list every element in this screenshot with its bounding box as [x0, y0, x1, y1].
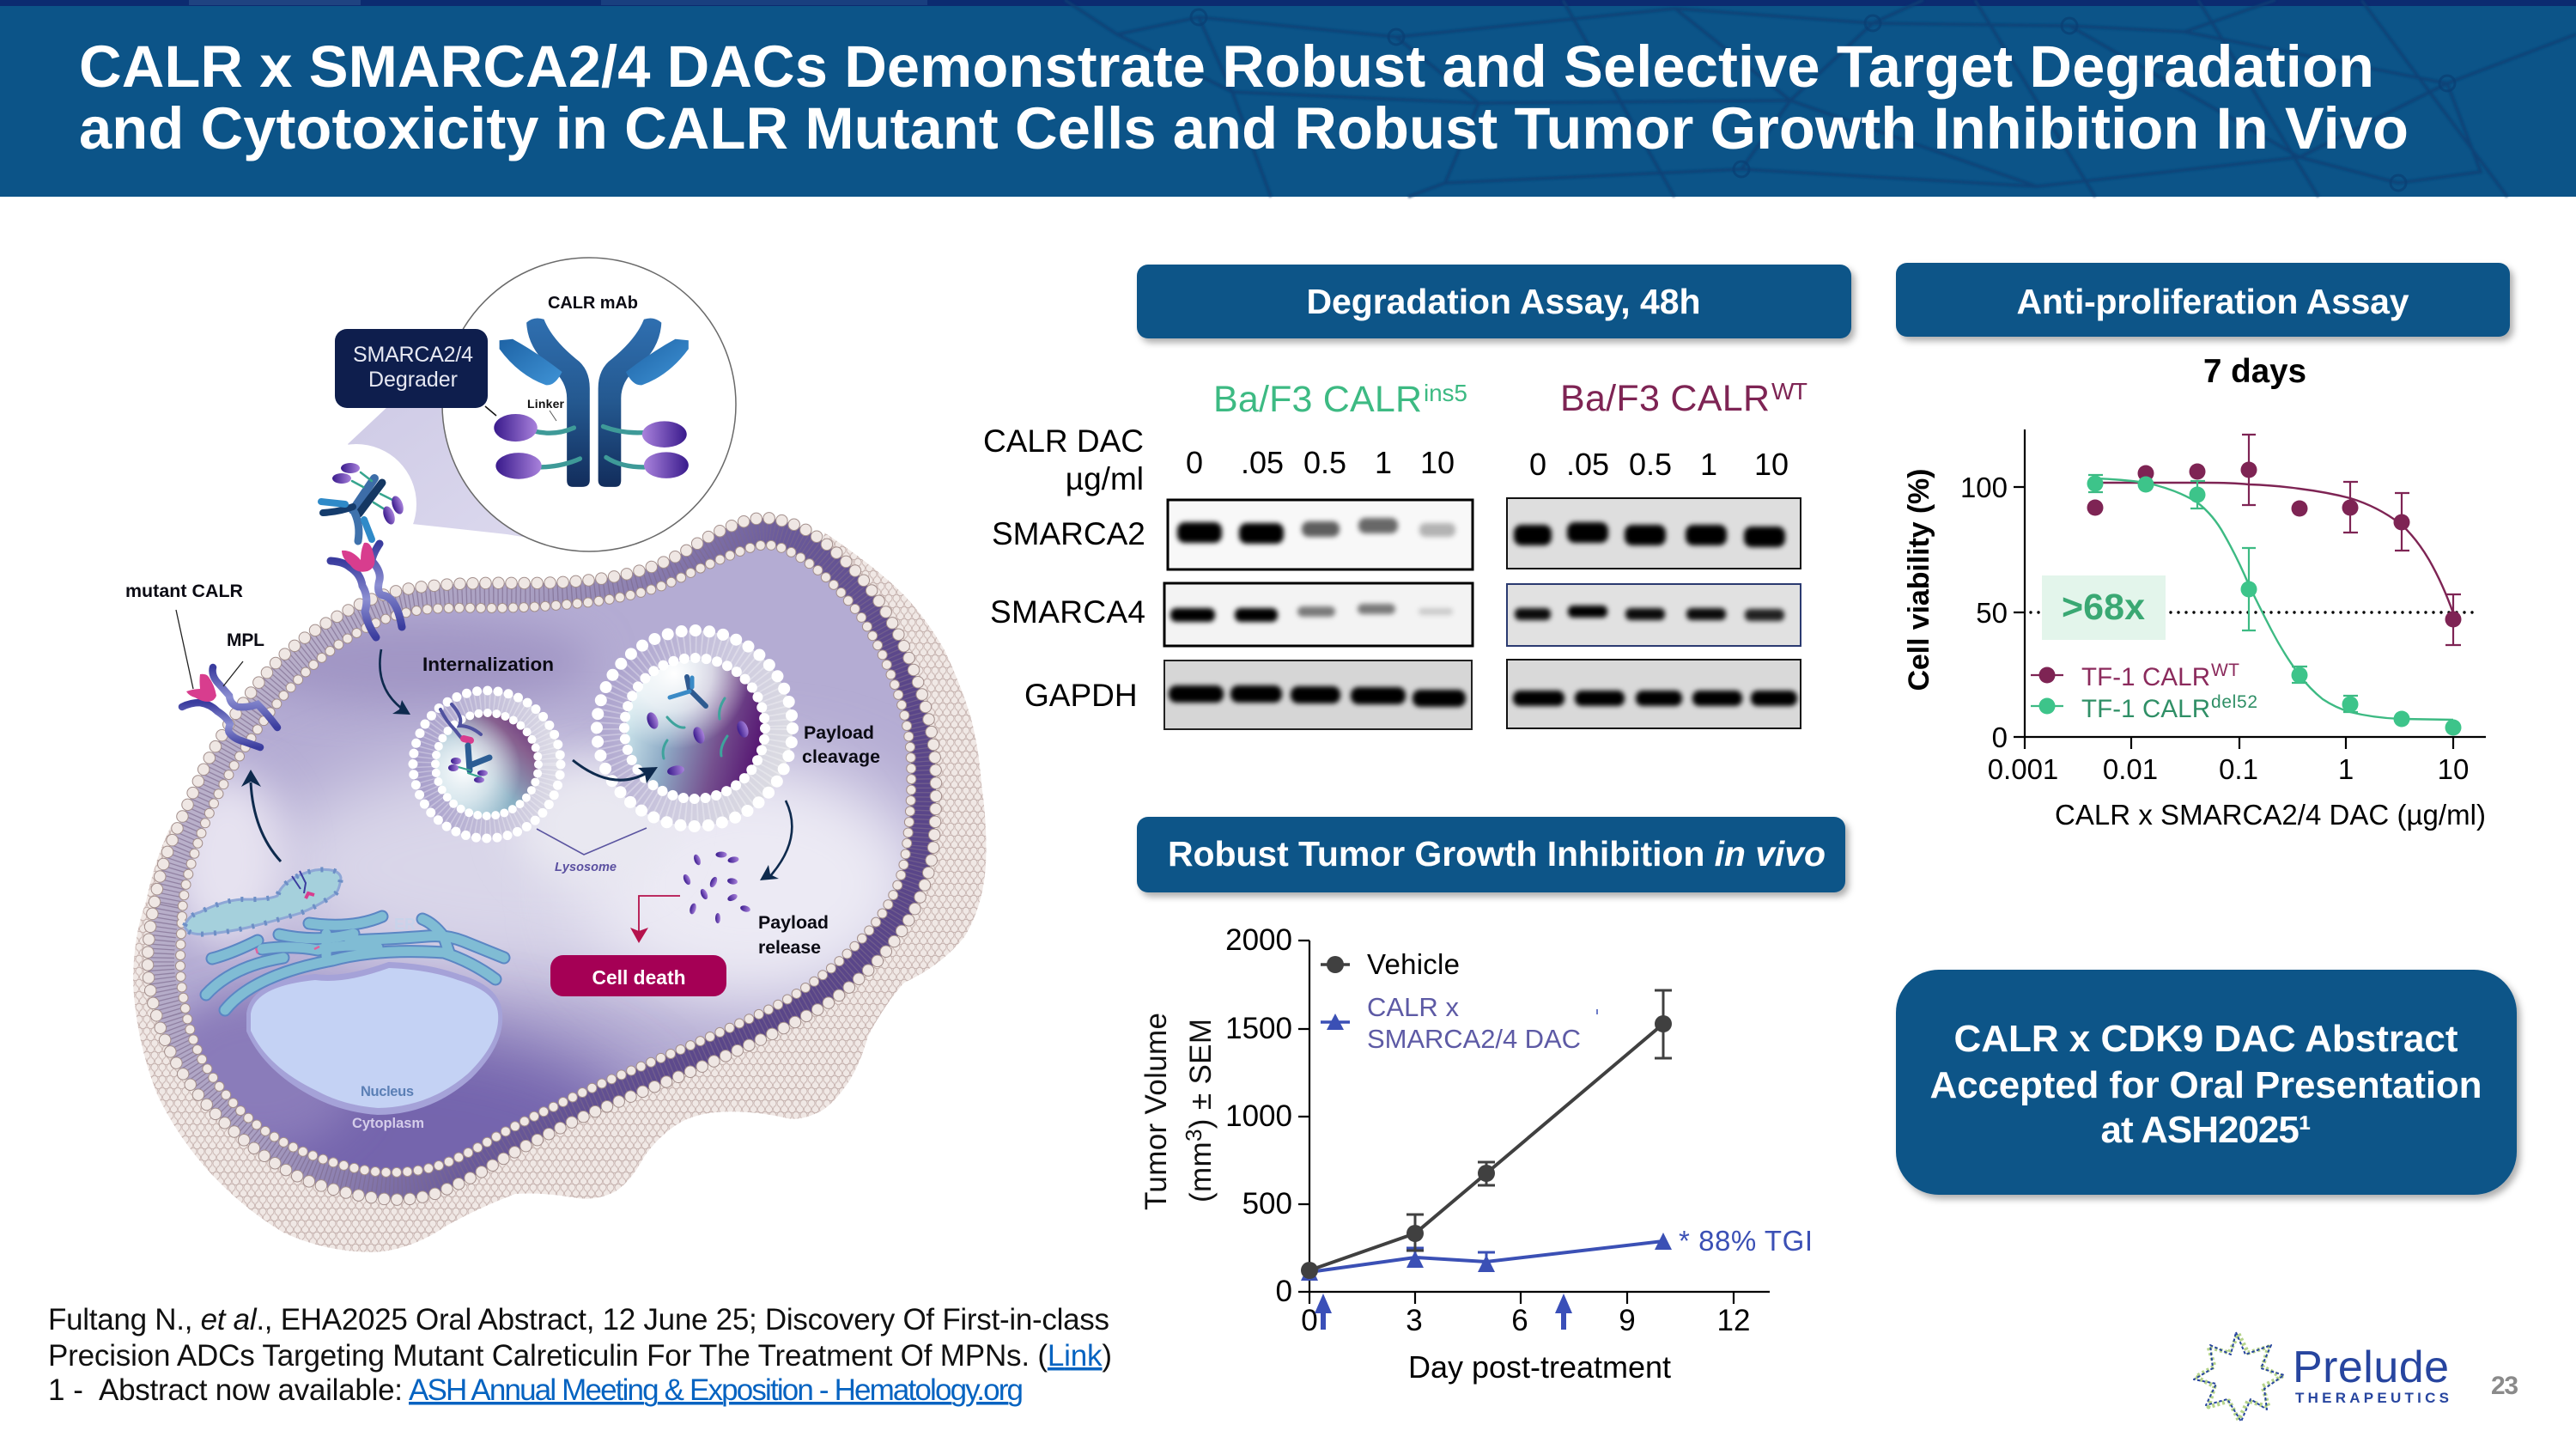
- header pill: degradation assay: Degradation Assay, 48h: [1307, 282, 1700, 321]
- blot: WT GAPDH: [1507, 660, 1801, 728]
- chart: tumor volume over time: [1139, 923, 1813, 1385]
- tick labels: 3: [1406, 1304, 1423, 1337]
- y axis title: 3: [1181, 1129, 1206, 1142]
- free payload particles: [682, 852, 751, 923]
- chart: cell viability dose response: [1903, 429, 2486, 831]
- label: payload release: Payload: [758, 912, 829, 933]
- magnifier circle with CALR mAb: [442, 258, 736, 551]
- curve: CALR WT: [2087, 435, 2461, 645]
- dose labels: 0.5: [1303, 445, 1346, 480]
- callout: abstract accepted: Accepted for Oral Presentation: [1930, 1064, 2482, 1106]
- lysosome early: [413, 691, 561, 838]
- callout: SMARCA2/4 degrader: Degrader: [368, 368, 458, 392]
- dose labels: 1: [1700, 447, 1717, 482]
- dose labels: 1: [1375, 445, 1392, 480]
- tick labels: 12: [1717, 1304, 1750, 1337]
- protein labels: [990, 516, 1145, 713]
- dose labels: 10: [1754, 447, 1789, 482]
- callout: abstract accepted: at ASH2025¹: [2100, 1109, 2312, 1151]
- header pill: tumor growth inhibition: [1137, 817, 1845, 892]
- footnote references: 1 -: [48, 1373, 83, 1407]
- tick labels: 500: [1242, 1187, 1292, 1221]
- y axis title: [1139, 1013, 1218, 1210]
- receptor with bound DAC: [321, 463, 405, 637]
- dose labels: 0.5: [1629, 447, 1672, 482]
- magnifier circle with CALR mAb: Linker: [527, 397, 565, 411]
- legend: Vehicle: [1367, 948, 1460, 980]
- callout: SMARCA2/4 degrader: SMARCA2/4: [353, 343, 473, 367]
- tick labels: 6: [1511, 1304, 1528, 1337]
- tick labels: 1500: [1225, 1012, 1292, 1045]
- header pill: anti-proliferation: [1896, 263, 2510, 337]
- protein labels: SMARCA4: [990, 594, 1145, 630]
- endoplasmic reticulum: ER: [394, 916, 416, 933]
- membrane outer bead row: [148, 518, 936, 1200]
- y axis title: Tumor Volume: [1139, 1013, 1173, 1210]
- y axis title: (mm: [1184, 1142, 1218, 1202]
- receptor: mutant CALR and MPL: [182, 667, 277, 747]
- cell death pill: Cell death: [592, 966, 685, 989]
- legend: WT: [2211, 661, 2239, 680]
- cell-line headings: Ba/F3 CALR: [1560, 378, 1770, 419]
- lysosome bracket label: Lysosome: [555, 861, 617, 874]
- nucleus: Nucleus: [361, 1084, 414, 1099]
- label: MPL: MPL: [227, 630, 264, 650]
- label: payload release: release: [758, 937, 821, 958]
- footnote references: Fultang N., et al., EHA2025 Oral Abstract, 12 June 25; Discovery Of First-in-class: [48, 1303, 1109, 1336]
- label: internalization: Internalization: [422, 654, 554, 675]
- label: payload cleavage: cleavage: [802, 746, 880, 767]
- series: DAC: [1301, 1233, 1672, 1281]
- protein labels: GAPDH: [1024, 678, 1138, 713]
- header pill: anti-proliferation: Anti-proliferation Assay: [2016, 282, 2409, 321]
- callout: abstract accepted: CALR x CDK9 DAC Abstract: [1954, 1018, 2458, 1060]
- title: CALR x SMARCA2/4 DACs Demonstrate Robust and Selective Target Degradation: [79, 33, 2374, 100]
- dosing arrows: [1315, 1294, 1572, 1330]
- lysosome late: [597, 630, 793, 826]
- lysosome bracket label: [537, 828, 647, 874]
- footnote references: [48, 1303, 1112, 1407]
- arrow: lysosome maturation: [573, 760, 658, 783]
- legend: [1321, 948, 1597, 1054]
- blot: ins5 GAPDH: [1164, 661, 1472, 729]
- tick labels: 1000: [1225, 1099, 1292, 1133]
- antibody: [494, 319, 689, 487]
- arrow: ER to membrane: [241, 770, 281, 861]
- arrow: internalization: [380, 649, 410, 715]
- page number: 23: [2491, 1372, 2518, 1400]
- blot: WT SMARCA4: [1507, 584, 1801, 646]
- tick labels: 0.1: [2219, 753, 2258, 785]
- title: and Cytotoxicity in CALR Mutant Cells and Robust Tumor Growth Inhibition In Vivo: [79, 95, 2409, 161]
- label: payload cleavage: [802, 722, 880, 767]
- tick labels: [1225, 923, 1750, 1337]
- membrane inner bead row: [180, 545, 911, 1172]
- dose labels: 0: [1186, 445, 1203, 480]
- tick labels: [1960, 472, 2469, 785]
- logo: Prelude Therapeutics: [2194, 1332, 2449, 1422]
- western blot panel: [983, 378, 1807, 729]
- protein labels: SMARCA2: [992, 516, 1145, 551]
- dose labels: CALR DAC: [983, 423, 1144, 459]
- axes: [2014, 429, 2486, 749]
- callout: abstract accepted: [1896, 970, 2517, 1195]
- subtitle: 7 days: 7 days: [2203, 353, 2306, 390]
- tick labels: 0: [1992, 721, 2008, 753]
- label: mutant CALR: [125, 581, 244, 689]
- header pill: tumor growth inhibition: Robust Tumor Growth Inhibition in vivo: [1168, 834, 1826, 874]
- illustration: mechanism of action cell: [77, 258, 986, 1280]
- x axis title: Day post-treatment: [1408, 1349, 1671, 1385]
- logo mark: [2194, 1332, 2284, 1422]
- cell-line headings: ins5: [1424, 380, 1467, 406]
- endoplasmic reticulum: [185, 869, 504, 1010]
- blot: ins5 SMARCA4: [1164, 583, 1473, 646]
- x axis title: CALR x SMARCA2/4 DAC (µg/ml): [2055, 799, 2486, 831]
- tick labels: 0.001: [1988, 753, 2058, 785]
- label: payload release: [758, 912, 829, 958]
- axes: [1298, 941, 1770, 1304]
- tick labels: 2000: [1225, 923, 1292, 957]
- curve: CALR del52: [2087, 475, 2461, 735]
- blot: ins5 SMARCA2: [1168, 500, 1473, 569]
- cell outer lipid surface: [133, 533, 986, 1252]
- fold-change badge: >68x: [2062, 587, 2145, 628]
- fold-change badge: [2042, 575, 2166, 640]
- legend: [2031, 661, 2257, 723]
- header pill: degradation assay: [1137, 265, 1851, 338]
- tick labels: 0: [1301, 1304, 1318, 1337]
- y axis title: Cell viability (%): [1903, 469, 1935, 691]
- label: payload cleavage: Payload: [804, 722, 874, 743]
- legend: CALR x: [1367, 992, 1460, 1022]
- tick labels: 9: [1619, 1304, 1636, 1337]
- magnifier circle with CALR mAb: CALR mAb: [548, 294, 638, 313]
- tick labels: 1: [2338, 753, 2354, 785]
- dose labels: 10: [1420, 445, 1455, 480]
- tick labels: 100: [1960, 472, 2008, 503]
- label: MPL: [223, 630, 264, 686]
- legend: TF-1 CALR: [2081, 663, 2210, 691]
- arrow: to cell death: [630, 896, 680, 943]
- series: vehicle: [1301, 990, 1672, 1279]
- footnote references: ASH Annual Meeting & Exposition - Hematology.org: [409, 1373, 1024, 1407]
- cytoplasm label: Cytoplasm: [352, 1116, 424, 1131]
- footnote references: Abstract now available:: [99, 1373, 403, 1407]
- cell-line headings: Ba/F3 CALR: [1213, 379, 1422, 420]
- cell-line headings: [1213, 378, 1807, 420]
- header banner: [0, 0, 2576, 197]
- blot: WT SMARCA2: [1507, 498, 1801, 569]
- nucleus: [249, 965, 500, 1112]
- arrow: payload release: [760, 801, 792, 880]
- logo: Prelude Therapeutics: THERAPEUTICS: [2295, 1390, 2449, 1406]
- dose labels: 0: [1529, 447, 1546, 482]
- dose labels: .05: [1241, 445, 1284, 480]
- cell death pill: [550, 955, 726, 996]
- 50 percent dotted line: [2031, 611, 2478, 614]
- cytoplasm: [180, 545, 912, 1172]
- tick labels: 0: [1276, 1275, 1292, 1308]
- tick labels: 10: [2438, 753, 2469, 785]
- dose labels: [983, 423, 1789, 496]
- annotation: TGI: * 88% TGI: [1679, 1225, 1813, 1257]
- title: [79, 33, 2409, 161]
- logo: Prelude Therapeutics: Prelude: [2293, 1342, 2449, 1392]
- cell-line headings: WT: [1771, 378, 1807, 405]
- tick labels: 50: [1976, 597, 2008, 629]
- callout: SMARCA2/4 degrader: [335, 329, 488, 408]
- dose labels: µg/ml: [1066, 461, 1144, 496]
- membrane band: [148, 518, 936, 1200]
- tick labels: 0.01: [2103, 753, 2158, 785]
- legend: del52: [2211, 692, 2257, 712]
- magnifier cone: [296, 404, 550, 564]
- legend: SMARCA2/4 DAC: [1367, 1024, 1581, 1054]
- y axis title: ) ± SEM: [1184, 1019, 1218, 1129]
- legend: TF-1 CALR: [2081, 695, 2210, 723]
- footnote references: Precision ADCs Targeting Mutant Calreticulin For The Treatment Of MPNs. (Link): [48, 1339, 1112, 1373]
- dose labels: .05: [1566, 447, 1609, 482]
- label: mutant CALR: mutant CALR: [125, 581, 244, 601]
